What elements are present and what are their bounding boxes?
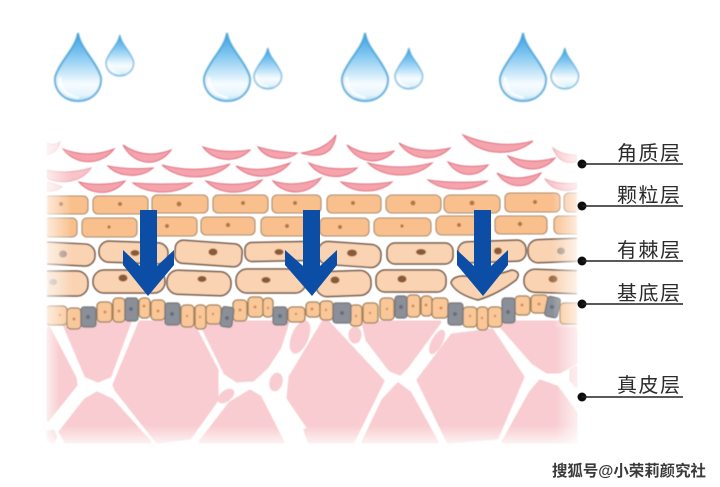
panel: basal layer cells (46, 295, 582, 330)
water droplets (55, 33, 579, 101)
panel: spinous layer cells (35, 238, 588, 300)
label: stratum corneum: 角质层 (617, 142, 682, 165)
skin cross-section diagram (34, 130, 589, 445)
label: basal layer (578, 282, 683, 308)
panel: granular layer cells (44, 193, 584, 237)
label: spinous layer (578, 239, 683, 266)
left and right edge fade (34, 130, 589, 330)
label: stratum corneum (578, 142, 683, 168)
label: basal layer: 基底层 (617, 282, 682, 305)
label: dermis: 真皮层 (617, 374, 682, 397)
icon: water drops group 2 (204, 33, 282, 101)
icon: water drops group 3 (342, 33, 423, 101)
watermark: 搜狐号@小荣莉颜究社 (552, 461, 706, 480)
panel: stratum corneum scales (47, 135, 577, 192)
label: spinous layer: 有棘层 (617, 239, 682, 262)
label: granular layer: 颗粒层 (617, 184, 682, 207)
label: dermis (578, 374, 683, 402)
labels (578, 142, 683, 402)
icon: water drops group 4 (500, 33, 579, 101)
panel: dermis layer (46, 318, 578, 445)
decorative elongated cell (286, 318, 314, 356)
arrow: penetration arrow 1 (123, 210, 174, 296)
arrow: penetration arrow 2 (285, 210, 337, 296)
arrow: penetration arrow 3 (457, 210, 508, 296)
label: granular layer (578, 184, 683, 210)
icon: water drops group 1 (55, 33, 134, 101)
